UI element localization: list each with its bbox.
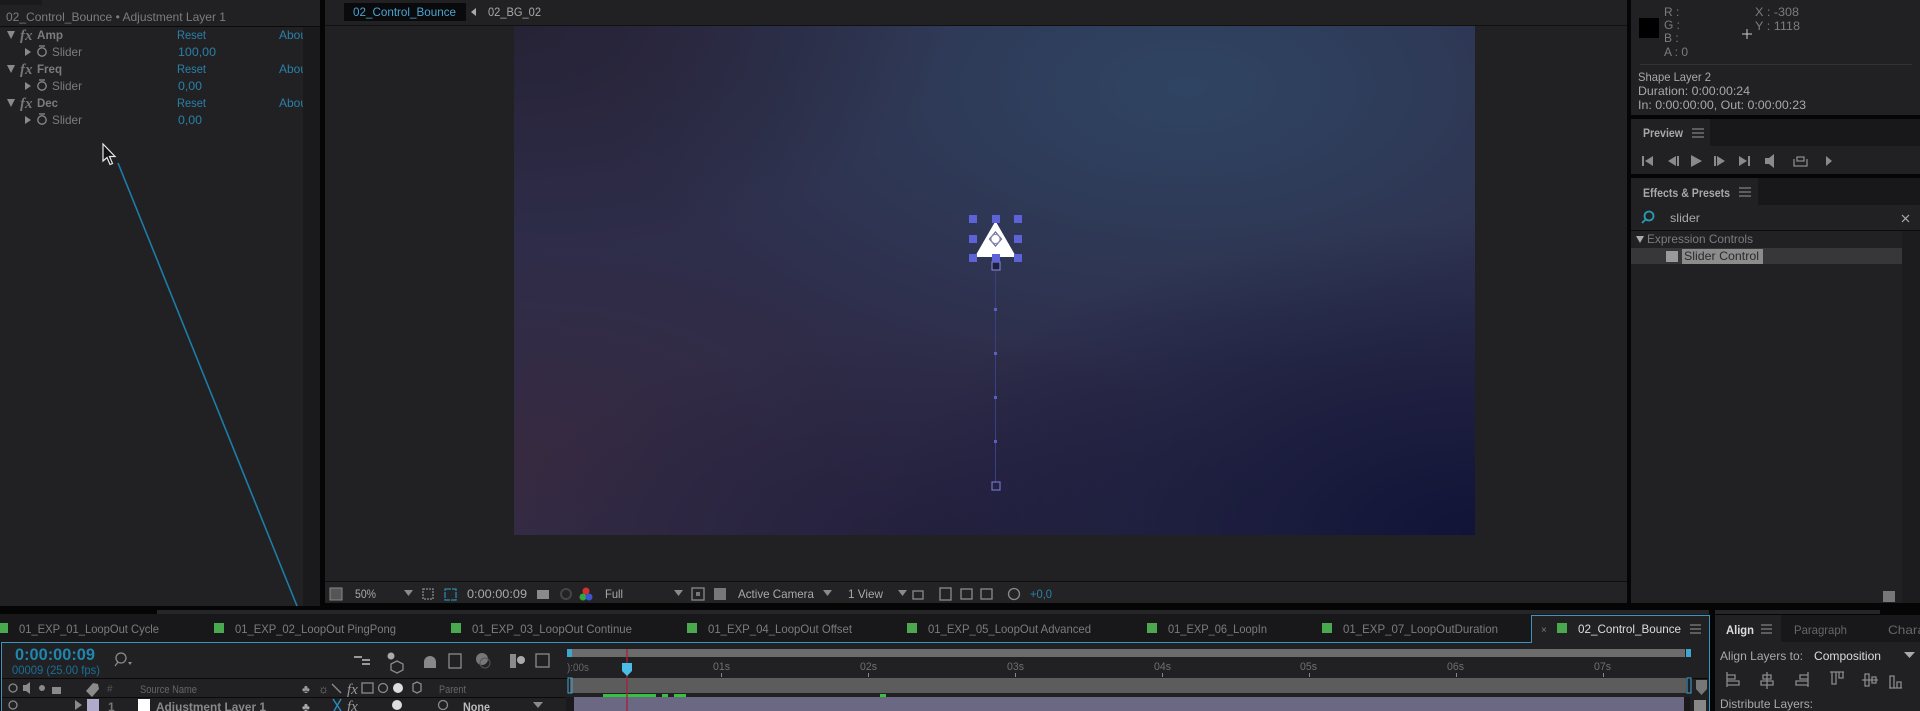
color values: A : 0 — [1664, 45, 1688, 59]
effect row: Amp: Reset — [177, 28, 207, 42]
layer info: Duration: 0:00:00:24 — [1638, 84, 1750, 98]
active tab — [1531, 615, 1709, 643]
time ruler: 02s — [860, 661, 877, 673]
list: slider control: Slider Control — [1684, 249, 1759, 263]
time ruler: 04s — [1154, 661, 1171, 673]
search field — [1642, 211, 1909, 225]
tab 2: 01_EXP_02_LoopOut PingPong — [235, 622, 396, 636]
playback controls — [1642, 154, 1832, 168]
layer bar — [574, 697, 1684, 711]
current time: 00009 (25.00 fps) — [12, 663, 100, 677]
effect row: Dec: fx — [20, 96, 33, 112]
active tab: 02_Control_Bounce — [1578, 622, 1681, 636]
effect row: Amp — [7, 30, 303, 58]
effect row: Freq: Slider — [52, 79, 82, 93]
cursor coordinates: X : -308 — [1755, 5, 1799, 19]
panel: timeline — [1, 616, 1710, 711]
time ruler: 01s — [713, 661, 730, 673]
time ruler: 06s — [1447, 661, 1464, 673]
tab 3: 01_EXP_03_LoopOut Continue — [472, 622, 632, 636]
tab: 02_BG_02: 02_BG_02 — [488, 5, 541, 19]
time ruler: ):00s — [567, 662, 589, 674]
time ruler — [567, 661, 1611, 677]
effect row: Freq: Freq — [37, 62, 62, 76]
panel: effects and presets — [1631, 178, 1920, 603]
cursor coordinates: Y : 1118 — [1755, 19, 1800, 33]
color swatch — [1639, 18, 1659, 38]
current time — [12, 645, 100, 677]
layer column headers: Source Name — [140, 684, 197, 696]
effect row: Freq: Reset — [177, 62, 207, 76]
tab 4: 01_EXP_04_LoopOut Offset — [708, 622, 853, 636]
layer row 1 — [9, 699, 543, 711]
composition canvas — [514, 26, 1475, 535]
layer column headers: Parent — [439, 684, 466, 696]
motion path — [992, 262, 1000, 490]
time ruler: 03s — [1007, 661, 1024, 673]
viewer toolbar: Active Camera — [738, 587, 814, 601]
layer info: Shape Layer 2 — [1638, 70, 1711, 84]
panel title: 02_Control_Bounce • Adjustment Layer 1 — [6, 10, 226, 24]
navigator bar — [568, 678, 1691, 693]
viewer toolbar: 1 View — [848, 587, 883, 601]
icon: search — [115, 653, 132, 666]
effect row: Amp: Amp — [37, 28, 63, 42]
icon: small toggle — [1694, 700, 1706, 711]
layer column headers — [9, 682, 466, 698]
align icons — [1727, 672, 1902, 689]
playhead — [622, 649, 632, 711]
preview render marks — [603, 694, 886, 697]
effect row: Dec: Reset — [177, 96, 207, 110]
effect row: Amp: fx — [20, 28, 33, 44]
current time: 0:00:00:09 — [15, 645, 95, 664]
layer column headers: fx — [347, 682, 358, 698]
label: distribute layers: Distribute Layers: — [1720, 697, 1813, 711]
viewer toolbar: +0,0 — [1030, 587, 1052, 601]
effect row: Freq: About — [279, 62, 311, 76]
icon: mouse cursor — [103, 144, 115, 164]
shape layer: white triangle with handles — [969, 215, 1022, 262]
tab: 02_Control_Bounce: 02_Control_Bounce — [353, 5, 456, 19]
layer column headers: ☼ — [318, 682, 329, 696]
blue annotation line — [118, 163, 297, 606]
color values: G : — [1664, 18, 1680, 32]
panel: effect controls — [0, 0, 320, 606]
composition tabs — [0, 614, 1709, 643]
label: align layers: Align Layers to: — [1720, 649, 1803, 663]
viewer toolbar: 50% — [355, 587, 376, 601]
viewer toolbar: Full — [605, 587, 623, 601]
layer info — [1638, 70, 1806, 112]
effect row: Dec: Dec — [37, 96, 58, 110]
effect row: Freq: 0,00 — [178, 79, 202, 93]
effect row: Amp: Slider — [52, 45, 82, 59]
timeline switches icons — [354, 652, 549, 673]
color values — [1664, 5, 1688, 59]
layer column headers: ♣ — [302, 682, 310, 696]
effect row: Freq: fx — [20, 62, 33, 78]
effect row: Amp: 100,00 — [178, 45, 216, 59]
panel: preview — [1631, 119, 1920, 174]
panel: info — [1631, 0, 1920, 115]
tab 6: 01_EXP_06_LoopIn — [1168, 622, 1267, 636]
effect row: Amp: About — [279, 28, 311, 42]
color values: R : — [1664, 5, 1679, 19]
viewer toolbar — [325, 581, 1627, 603]
tab: Character: Chara — [1888, 623, 1920, 637]
layer info: In: 0:00:00:00, Out: 0:00:00:23 — [1638, 98, 1806, 112]
icon: breadcrumb arrow — [471, 8, 476, 16]
search field: slider — [1670, 211, 1700, 225]
label: align layers — [1720, 649, 1915, 663]
effect row: Freq — [7, 64, 303, 92]
time ruler: 05s — [1300, 661, 1317, 673]
list: slider control — [1631, 248, 1902, 264]
heading: Preview — [1643, 126, 1684, 140]
active tab: × — [1541, 625, 1547, 636]
tab: Paragraph: Paragraph — [1794, 623, 1847, 637]
label: align layers: Composition — [1814, 649, 1881, 663]
icon: zoom shield — [1696, 680, 1707, 695]
tab: 02_Control_Bounce — [344, 3, 466, 21]
effect row: Dec: 0,00 — [178, 113, 202, 127]
cursor coordinates — [1742, 5, 1800, 39]
effect row: Dec: Slider — [52, 113, 82, 127]
effect row: Dec: About — [279, 96, 311, 110]
tab: Align: Align — [1726, 623, 1754, 637]
tab 7: 01_EXP_07_LoopOutDuration — [1343, 622, 1498, 636]
list: expression controls: Expression Controls — [1647, 232, 1753, 246]
bar: top scroll — [157, 610, 1880, 614]
tab 5: 01_EXP_05_LoopOut Advanced — [928, 622, 1091, 636]
viewer toolbar: 0:00:00:09 — [467, 587, 527, 601]
panel: composition viewer — [325, 0, 1627, 603]
heading: Effects & Presets — [1643, 186, 1730, 200]
effect row: Dec — [7, 98, 303, 126]
tab 1: 01_EXP_01_LoopOut Cycle — [19, 622, 159, 636]
layer column headers: # — [107, 684, 113, 695]
work area bar — [567, 649, 1691, 657]
time ruler: 07s — [1594, 661, 1611, 673]
color values: B : — [1664, 31, 1679, 45]
panel: align — [1715, 615, 1920, 711]
